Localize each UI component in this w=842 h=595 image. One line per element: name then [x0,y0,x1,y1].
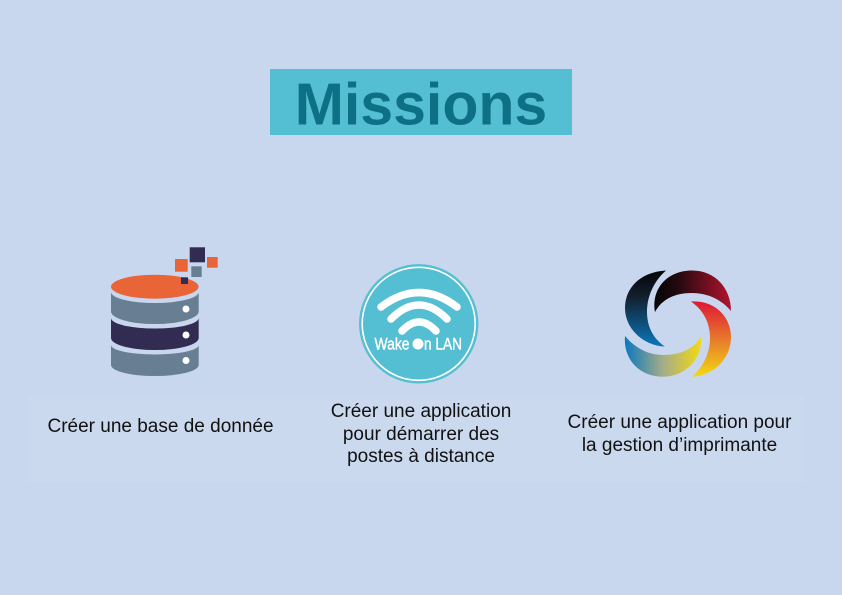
icon: printer management swirl [625,270,731,377]
icon: database [111,247,218,376]
text: Wake on LAN mission: pour démarrer des [343,424,499,445]
text: printer mission: Créer une application pour [568,412,792,433]
text: database mission: Créer une base de donnée [47,416,274,437]
text: printer mission: la gestion d’imprimante [582,435,777,456]
icon: Wake on LAN: Wake [374,334,410,353]
icon: Wake on LAN [359,264,478,383]
text: Wake on LAN mission: postes à distance [347,446,495,467]
text: Wake on LAN mission: Créer une application [331,401,511,422]
icon: Wake on LAN: n LAN [424,334,462,353]
title: Missions: Missions [295,72,547,138]
faint text band [28,396,804,482]
